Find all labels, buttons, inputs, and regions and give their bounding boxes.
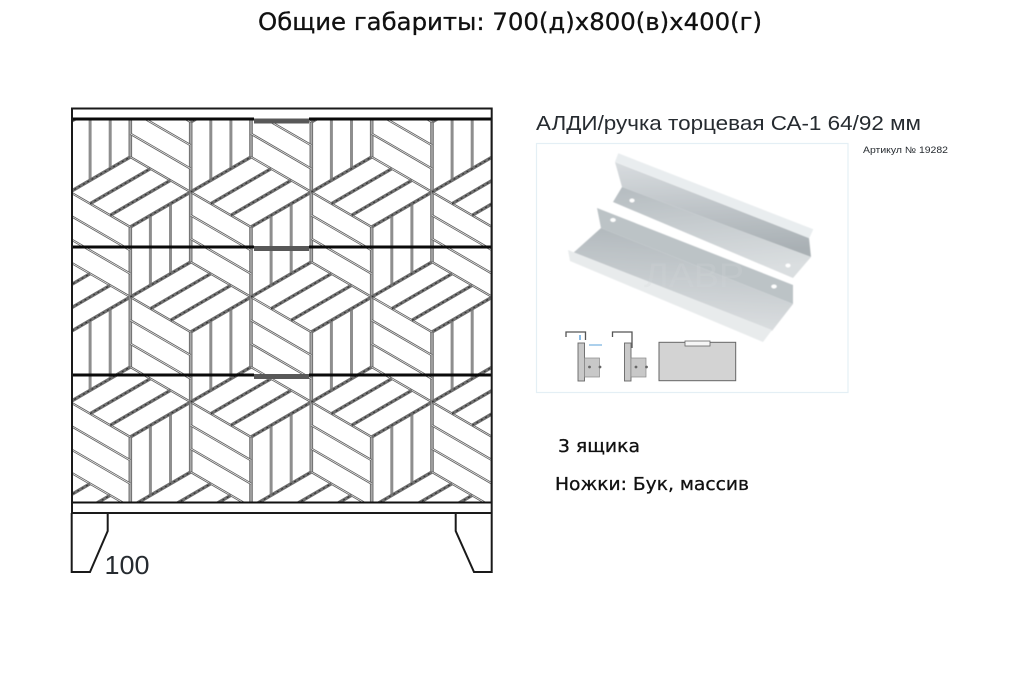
mounting diagram 2 <box>612 332 648 381</box>
drawer handles <box>254 118 309 379</box>
mounting diagram 1 <box>566 332 602 381</box>
bottom rail <box>72 502 492 504</box>
drawer front diagram <box>659 341 736 381</box>
upper handle <box>613 153 813 278</box>
article number: Артикул № 19282 <box>863 145 948 155</box>
handle name heading: АЛДИ/ручка торцевая СА-1 64/92 мм <box>536 113 921 135</box>
carcass outline <box>72 108 492 513</box>
title: Общие габариты: 700(д)х800(в)х400(г) <box>258 8 762 36</box>
cube pattern on drawer fronts <box>73 120 491 502</box>
chest of drawers drawing <box>70 108 493 573</box>
picture frame <box>536 144 848 392</box>
left leg <box>72 513 108 572</box>
lower handle <box>568 208 793 342</box>
handle product picture <box>536 144 848 392</box>
legs material note: Ножки: Бук, массив <box>555 475 749 495</box>
watermark: ЛАВР <box>644 257 744 295</box>
drawer divider lines <box>72 119 492 375</box>
drawer count note: 3 ящика <box>558 437 640 457</box>
right leg <box>456 513 492 572</box>
leg height label: 100 <box>104 552 150 580</box>
